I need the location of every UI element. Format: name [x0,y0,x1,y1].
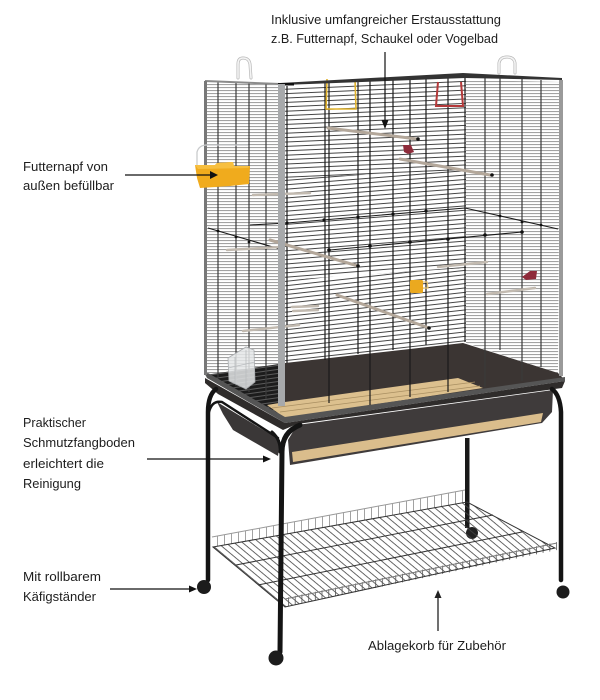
cage corner posts [204,80,563,406]
left wall wires [206,82,280,375]
text: food bowl callout: außen befüllbar [23,179,114,193]
heading: included accessories [271,13,501,46]
text: food bowl callout: Futternapf von [23,160,108,174]
red toy lower [522,271,537,280]
bird cage on stand [195,57,570,666]
horizontal ring wires [208,208,558,250]
text: dirt tray callout: Schmutzfangboden [23,436,135,450]
centre wall wires [284,80,466,364]
text: storage basket callout: Ablagekorb für Zubehör [368,639,506,653]
arrow: accessories [382,52,388,129]
stand legs [208,389,561,652]
text: dirt tray callout: Praktischer [23,416,86,430]
text: rolling stand callout [23,570,101,604]
casters [197,580,570,666]
hanger hooks [238,57,515,78]
rear leg and caster [465,438,478,539]
heading: included accessories: z.B. Futternapf, Schaukel oder Vogelbad [271,32,498,46]
under-tray drawer body [217,390,553,465]
right wall wires [466,80,560,373]
yellow swing [326,79,356,109]
food bowl [195,145,250,188]
wire junctions [217,209,542,252]
storage basket [212,490,557,607]
arrow: food bowl [125,171,218,179]
red toy upper [403,145,414,154]
text: dirt tray callout: erleichtert die [23,457,104,471]
arrow: rolling stand [110,586,197,592]
text: rolling stand callout: Mit rollbarem [23,570,101,584]
heading: included accessories: Inklusive umfangreicher Erstausstattung [271,13,501,27]
red swing [436,82,463,106]
cage tray [205,343,565,430]
cage top frame [205,73,562,86]
perches [227,128,535,331]
water bath [228,347,255,389]
text: rolling stand callout: Käfigständer [23,590,96,604]
text: dirt tray callout [23,416,135,491]
text: dirt tray callout: Reinigung [23,477,81,491]
arrow: dirt tray [147,456,271,462]
vertical bars [218,76,541,405]
text: food bowl callout [23,160,114,193]
small yellow cup [410,280,428,293]
arrow: storage basket [434,590,442,631]
